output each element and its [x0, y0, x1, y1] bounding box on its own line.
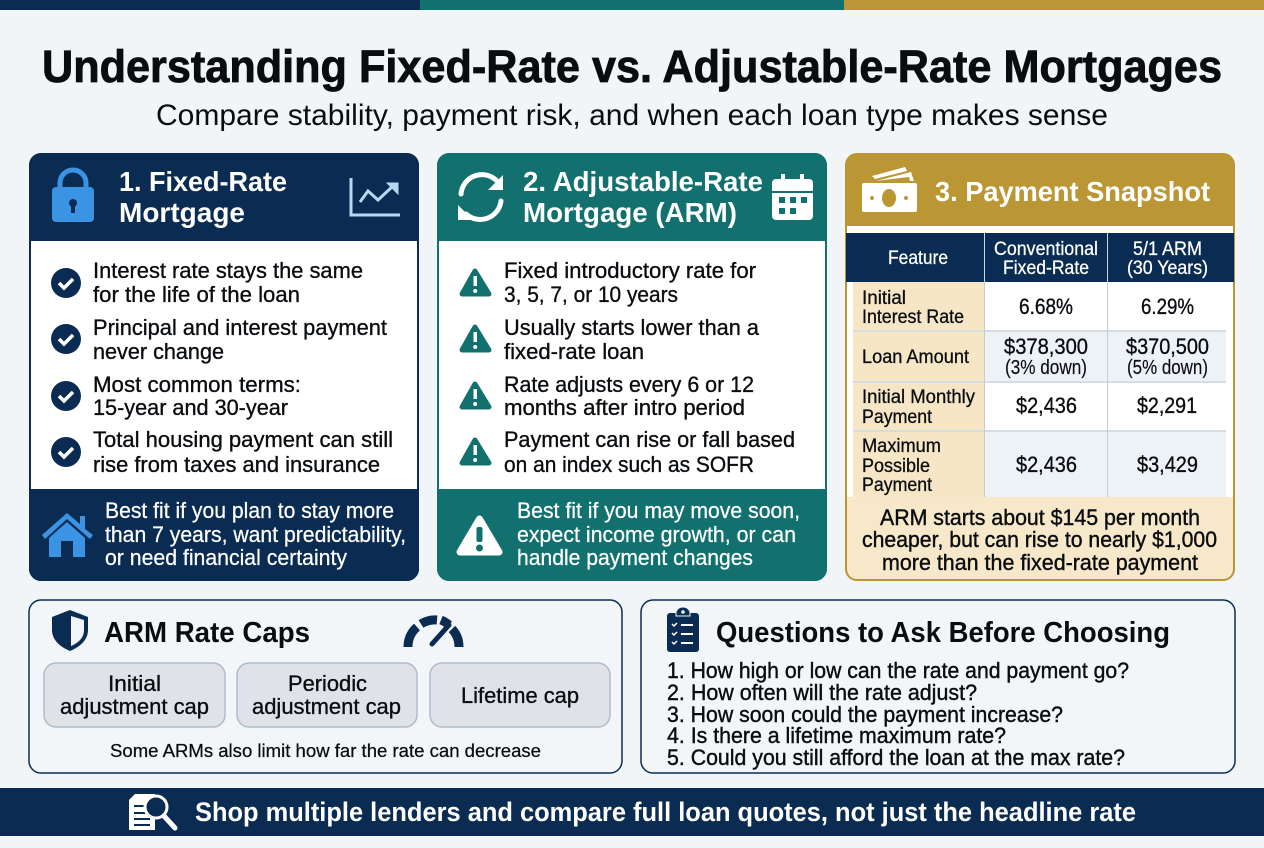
row: initial interest rate: Interest Rate	[862, 307, 964, 328]
icon: check	[51, 324, 81, 354]
row backgrounds	[853, 282, 1226, 499]
best fit text: handle payment changes	[517, 545, 753, 570]
callout: payment takeaway: cheaper, but can rise to nearly $1,000	[862, 527, 1217, 552]
heading: adjustable-rate mortgage: Mortgage (ARM)	[523, 197, 737, 228]
icon: warning	[462, 327, 489, 350]
best fit text: Best fit if you plan to stay more	[105, 498, 394, 523]
cap box: initial adjustment	[44, 663, 225, 727]
icon: cash	[862, 167, 917, 212]
best fit text	[517, 498, 800, 570]
point: total housing payment	[93, 427, 393, 477]
row: maximum possible payment: Payment	[862, 475, 933, 496]
best fit text	[105, 498, 406, 570]
row: initial monthly payment: $2,291	[1137, 393, 1197, 418]
callout: ARM best fit	[437, 489, 827, 581]
icon: house	[42, 513, 93, 557]
row: initial monthly payment	[862, 387, 1197, 428]
heading: adjustable-rate mortgage	[523, 166, 763, 228]
row: maximum possible payment	[862, 436, 1198, 496]
cap box: initial adjustment: Initial	[108, 671, 161, 696]
icon: gauge	[408, 620, 459, 647]
point: rate adjusts: Rate adjusts every 6 or 12	[504, 372, 754, 397]
callout: payment takeaway	[846, 497, 1234, 580]
row: loan amount: $370,500	[1126, 334, 1209, 359]
row: maximum possible payment: Possible	[862, 456, 930, 477]
heading: payment snapshot: 3. Payment Snapshot	[935, 176, 1210, 207]
table header row: (30 Years)	[1127, 258, 1208, 279]
panel header: ARM	[437, 153, 827, 241]
icon: warning	[462, 384, 489, 407]
callout: payment takeaway: ARM starts about $145 per month	[880, 505, 1200, 530]
subtitle: Compare stability, payment risk, and when each loan type makes sense	[156, 99, 1108, 132]
question list: 3. How soon could the payment increase?	[667, 702, 1063, 727]
callout: payment takeaway: more than the fixed-rate payment	[882, 550, 1198, 575]
table header row: Fixed-Rate	[1003, 258, 1089, 279]
question list: 2. How often will the rate adjust?	[667, 680, 977, 705]
row: initial monthly payment: $2,436	[1016, 393, 1077, 418]
banner text: Shop multiple lenders and compare full loan quotes, not just the headline rate	[195, 797, 1136, 827]
table header row: Feature	[888, 248, 948, 269]
point: common terms	[93, 372, 301, 420]
banner: shop multiple lenders	[0, 788, 1264, 836]
panel: ARM rate caps	[29, 600, 622, 773]
table header row	[846, 233, 1234, 282]
panel: questions to ask	[641, 600, 1235, 773]
title: Understanding Fixed-Rate vs. Adjustable-Rate Mortgages	[42, 41, 1222, 92]
icon: warning	[462, 440, 489, 463]
cap box: periodic adjustment	[237, 663, 417, 727]
row: loan amount: (3% down)	[1005, 357, 1087, 379]
question list: 4. Is there a lifetime maximum rate?	[667, 723, 1006, 748]
row: loan amount: $378,300	[1004, 334, 1088, 359]
best fit text: or need financial certainty	[105, 545, 348, 570]
question list: 1. How high or low can the rate and payment go?	[667, 658, 1129, 683]
cap box: lifetime	[430, 663, 610, 727]
table header row: 5/1 ARM	[1133, 239, 1202, 260]
heading: adjustable-rate mortgage: 2. Adjustable-Rate	[523, 166, 763, 197]
icon: line chart	[351, 178, 400, 215]
cap box: initial adjustment: adjustment cap	[60, 694, 209, 719]
point: intro rate: Fixed introductory rate for	[504, 258, 756, 283]
point: interest rate: for the life of the loan	[93, 282, 300, 307]
heading: fixed-rate mortgage	[119, 166, 287, 228]
icon: clipboard checklist	[667, 607, 699, 652]
icon: check	[51, 437, 81, 467]
checklist: fixed-rate points	[51, 258, 393, 477]
question list	[667, 658, 1129, 770]
icon: calendar	[772, 174, 813, 220]
point: payment changes: on an index such as SOFR	[504, 452, 754, 477]
cap box: periodic adjustment: Periodic	[288, 671, 367, 696]
point: interest rate: Interest rate stays the same	[93, 258, 363, 283]
comparison table	[846, 233, 1234, 499]
point: starts lower: Usually starts lower than a	[504, 315, 759, 340]
panel: adjustable-rate mortgage	[437, 153, 827, 581]
top colour bar	[0, 0, 1264, 10]
point: common terms: Most common terms:	[93, 372, 301, 397]
icon: document with magnifier	[129, 794, 175, 830]
panel: payment snapshot	[845, 153, 1235, 580]
icon: padlock	[52, 170, 94, 222]
table header row: Conventional	[994, 239, 1098, 260]
point: interest rate	[93, 258, 363, 307]
point: payment changes: Payment can rise or fall based	[504, 427, 795, 452]
point: principal and interest: never change	[93, 339, 224, 364]
row: initial interest rate	[862, 288, 1194, 328]
point: total housing payment: rise from taxes and insurance	[93, 452, 380, 477]
cap box: periodic adjustment: adjustment cap	[252, 694, 401, 719]
row: initial interest rate: Initial	[862, 288, 906, 309]
row: initial monthly payment: Payment	[862, 407, 933, 428]
point: rate adjusts: months after intro period	[504, 395, 745, 420]
heading: questions: Questions to Ask Before Choosing	[716, 617, 1170, 649]
point: common terms: 15-year and 30-year	[93, 395, 288, 420]
best fit text: expect income growth, or can	[517, 522, 796, 547]
row: initial interest rate: 6.68%	[1019, 294, 1073, 319]
row: maximum possible payment: $3,429	[1137, 452, 1198, 477]
panel header: fixed-rate	[29, 153, 419, 241]
icon: warning	[462, 271, 489, 294]
heading: fixed-rate mortgage: Mortgage	[119, 197, 245, 228]
row: maximum possible payment: $2,436	[1016, 452, 1077, 477]
icon: shield	[52, 610, 88, 651]
point: payment changes	[504, 427, 795, 477]
best fit text: Best fit if you may move soon,	[517, 498, 800, 523]
row: initial monthly payment: Initial Monthly	[862, 387, 975, 408]
row: loan amount: (5% down)	[1127, 357, 1208, 379]
row: loan amount	[862, 334, 1209, 379]
question list: 5. Could you still afford the loan at the max rate?	[667, 745, 1125, 770]
heading: ARM rate caps: ARM Rate Caps	[104, 617, 310, 649]
point: intro rate	[504, 258, 756, 307]
panel header: payment snapshot	[845, 153, 1235, 226]
callout: fixed-rate best fit	[29, 489, 419, 581]
point: principal and interest: Principal and interest payment	[93, 315, 388, 340]
icon: refresh arrows	[458, 175, 503, 220]
icon: check	[51, 381, 81, 411]
panel: fixed-rate mortgage	[29, 153, 419, 581]
row: initial interest rate: 6.29%	[1141, 294, 1194, 319]
heading: fixed-rate mortgage: 1. Fixed-Rate	[119, 166, 287, 197]
point: starts lower	[504, 315, 759, 364]
row: loan amount: Loan Amount	[862, 347, 970, 368]
icon: large warning	[460, 519, 499, 552]
best fit text: than 7 years, want predictability,	[105, 522, 406, 547]
checklist: ARM points	[462, 258, 795, 477]
point: intro rate: 3, 5, 7, or 10 years	[504, 282, 678, 307]
point: principal and interest	[93, 315, 388, 364]
cap box: lifetime: Lifetime cap	[461, 683, 579, 708]
icon: check	[51, 268, 81, 298]
row: maximum possible payment: Maximum	[862, 436, 941, 457]
point: starts lower: fixed-rate loan	[504, 339, 644, 364]
point: total housing payment: Total housing payment can still	[93, 427, 393, 452]
point: rate adjusts	[504, 372, 754, 420]
note: rate decrease limits: Some ARMs also limit how far the rate can decrease	[110, 740, 541, 761]
